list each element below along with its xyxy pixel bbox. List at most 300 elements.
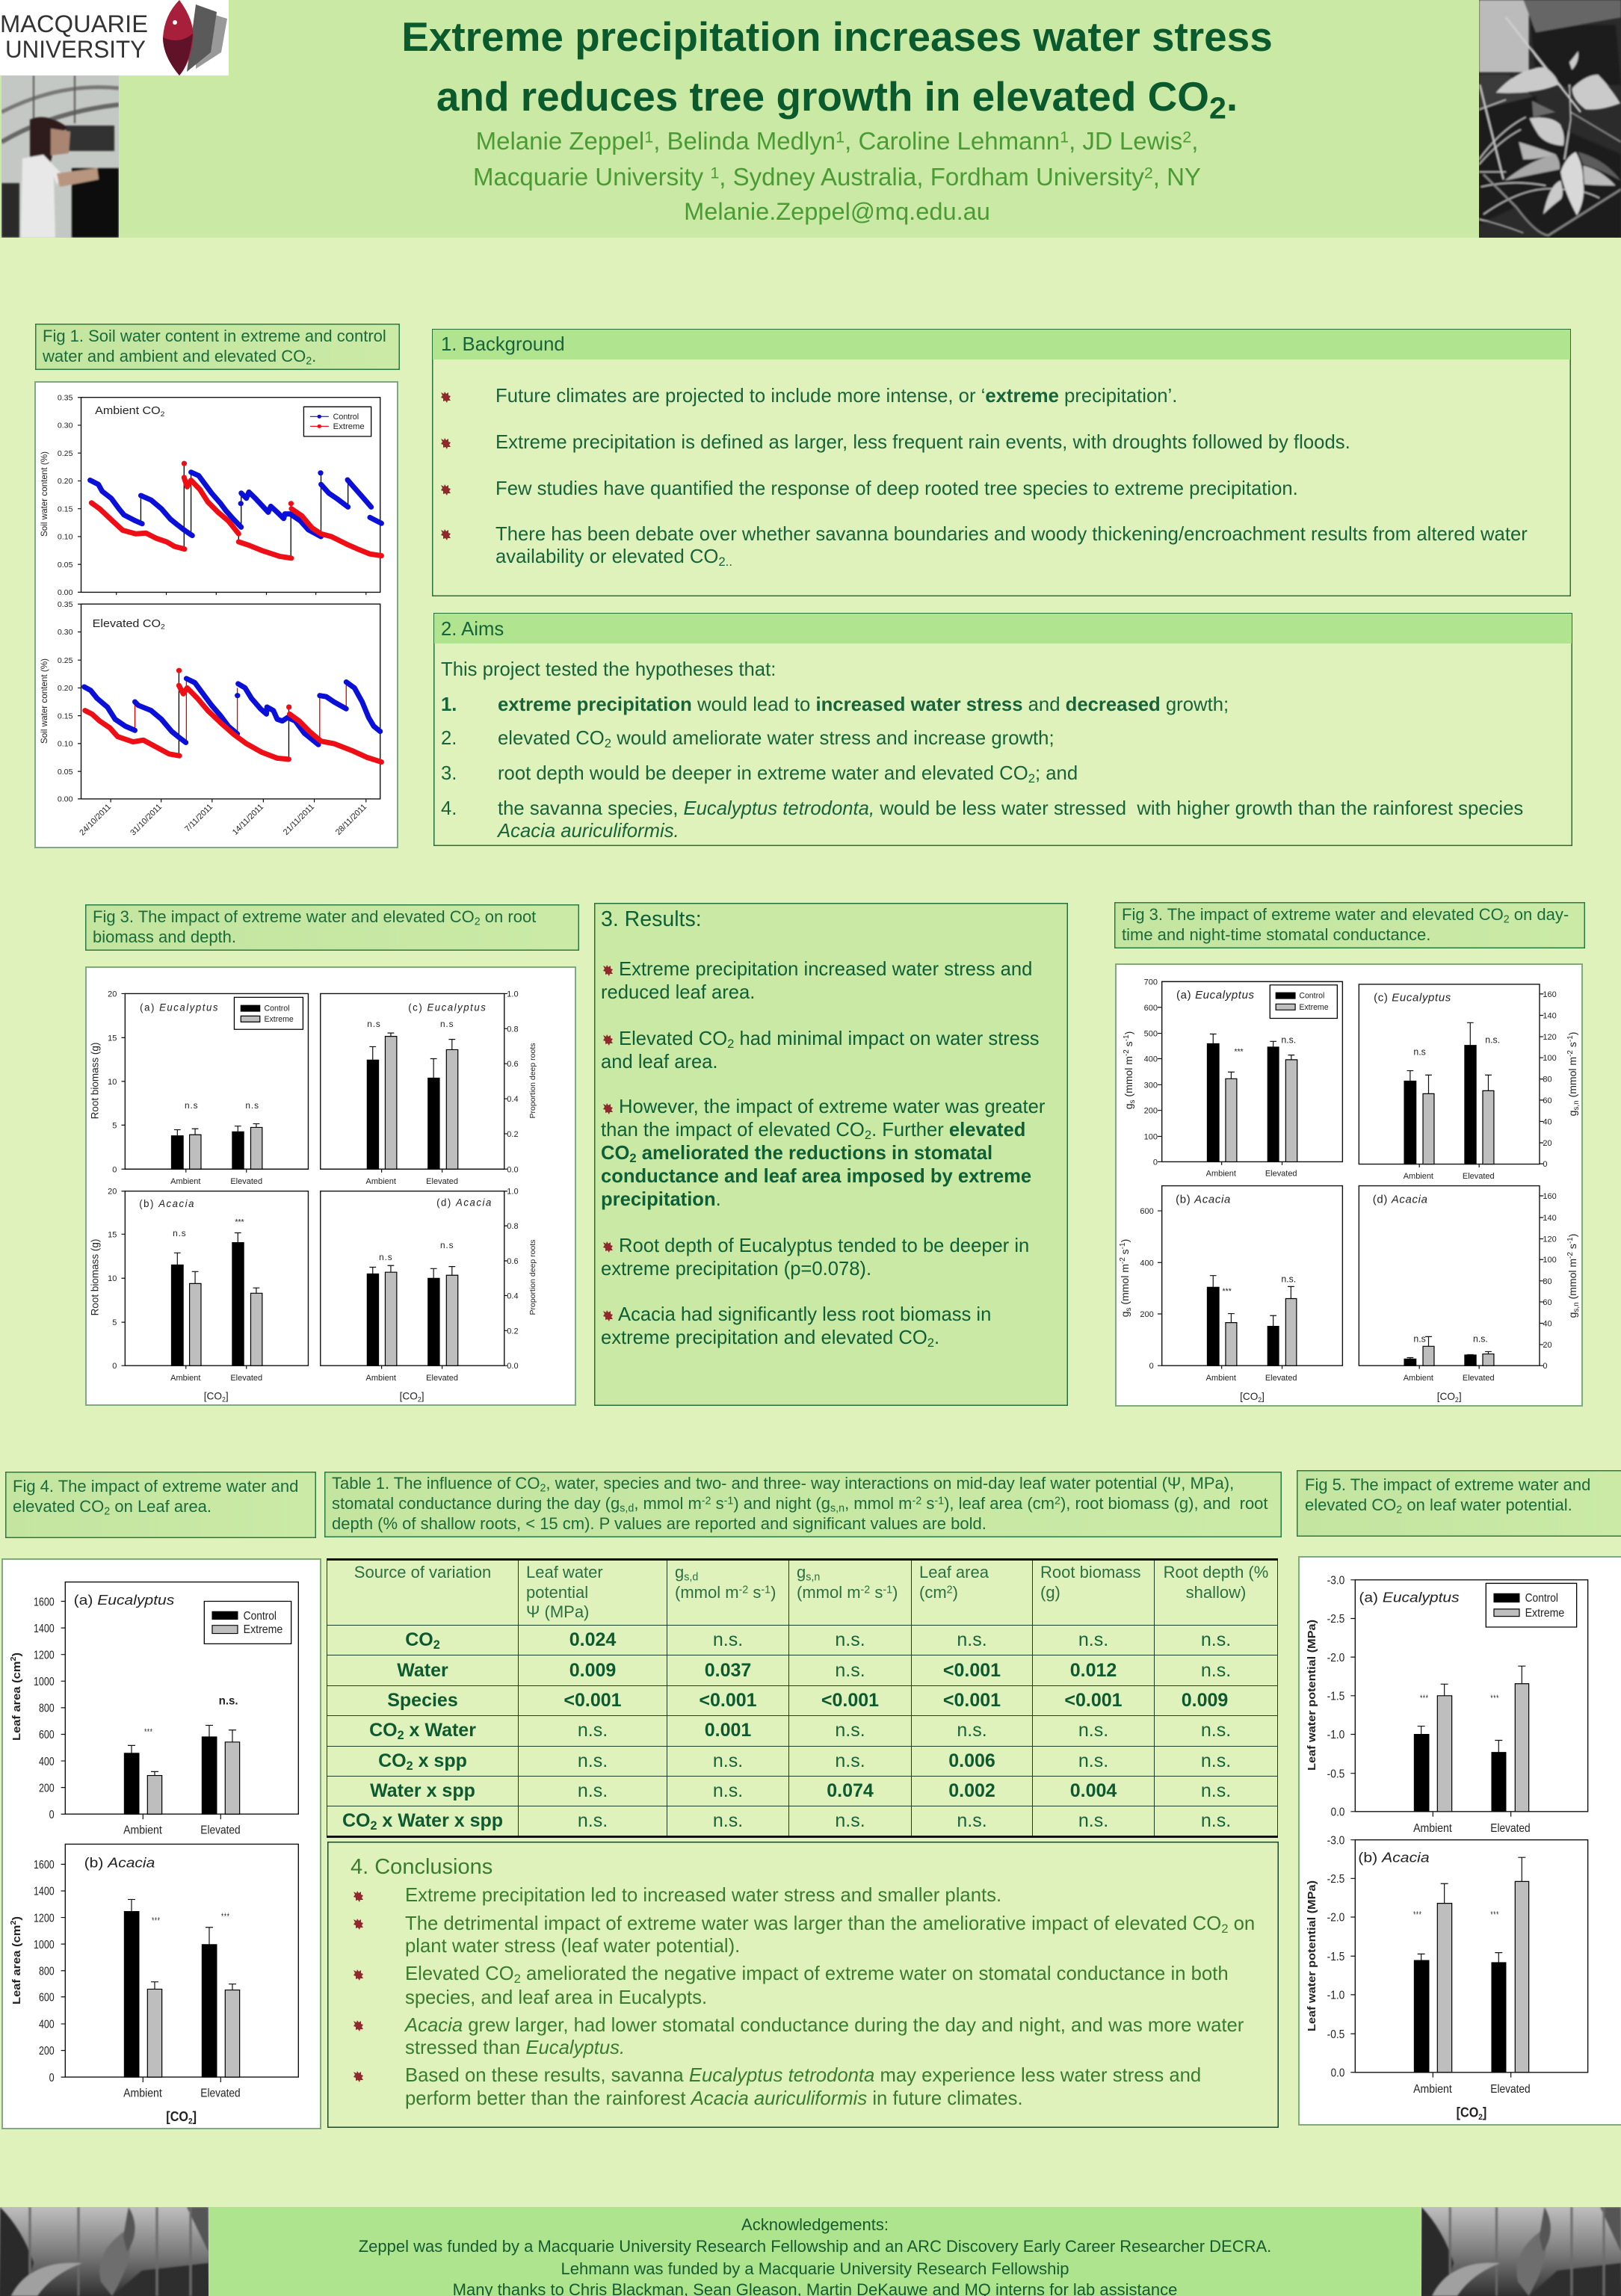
chart: leaf area: Control — [244, 1609, 277, 1623]
section: 4 conclusions: perform better than the rainforest Acacia auriculiformis in future climates. — [405, 2088, 1023, 2109]
y-axis titles: s,n — [1572, 1302, 1581, 1312]
section: 1 background: availability or elevated CO2.. — [495, 546, 732, 569]
y-axis titles — [10, 1652, 23, 2005]
table: ANOVA results: n.s. — [578, 1810, 608, 1831]
chart: soil water ambient and elevated CO2: Ambient CO — [95, 405, 138, 416]
chart: day and night stomatal conductance: 500 — [1144, 1030, 1158, 1039]
y-axis titles: -1 — [1119, 1242, 1127, 1249]
chart: root biomass and proportion deep roots: n.s — [379, 1252, 393, 1262]
logo: Macquarie University: UNIVERSITY — [5, 36, 146, 63]
chart: leaf water potential: [CO — [1457, 2105, 1471, 2120]
chart: root biomass and proportion deep roots: Extreme — [264, 1015, 294, 1024]
section: 3 results — [594, 903, 1068, 1406]
table: ANOVA results: n.s. — [1201, 1750, 1231, 1771]
chart: day and night stomatal conductance: Elevated — [1265, 1374, 1297, 1383]
chart: day and night stomatal conductance: 40 — [1543, 1117, 1552, 1126]
chart: root biomass and proportion deep roots: Ambient — [366, 1374, 396, 1383]
chart: leaf area: Elevated — [200, 1823, 241, 1836]
chart: leaf area: n.s. — [219, 1694, 238, 1707]
logo: Macquarie University: MACQUARIE — [0, 10, 148, 37]
chart: root biomass and proportion deep roots: 0.2 — [507, 1327, 519, 1336]
chart: leaf water potential: *** — [1491, 1694, 1499, 1704]
section: 2 aims: root depth would be deeper in extreme water and elevated CO2; and — [498, 763, 1078, 786]
table: ANOVA results: shallow) — [1186, 1583, 1246, 1601]
chart: root biomass and proportion deep roots: 0.8 — [507, 1025, 519, 1034]
table: ANOVA results: <0.001 — [564, 1690, 622, 1711]
chart: soil water ambient and elevated CO2: 0.30 — [58, 628, 73, 636]
caption: fig 1 — [35, 324, 400, 370]
table: ANOVA results: n.s. — [835, 1660, 865, 1681]
chart: root biomass and proportion deep roots: n.s — [245, 1100, 259, 1111]
chart: leaf area: Ambient — [123, 1823, 162, 1836]
section: 3 results: conductance and leaf area imposed by extreme — [601, 1166, 1031, 1187]
chart: root biomass and proportion deep roots: 0.2 — [507, 1130, 519, 1139]
chart: day and night stomatal conductance: 0 — [1543, 1362, 1548, 1371]
chart: soil water ambient and elevated CO2: 0.05 — [58, 768, 73, 776]
section: 4 conclusions: Elevated CO2 ameliorated the negative impact of extreme water on stomatal conductance in both — [405, 1963, 1229, 1986]
y-axis titles: (mmol m — [1119, 1264, 1131, 1307]
table: ANOVA results: n.s. — [1201, 1660, 1231, 1681]
photo: footer plants right — [1421, 2207, 1621, 2296]
table: ANOVA results: n.s. — [1201, 1720, 1231, 1741]
caption: table 1: Table 1. The influence of CO2, water, species and two- and three- way interactions on mid-day leaf water potential (Ψ, MPa), — [332, 1474, 1234, 1495]
chart: root biomass and proportion deep roots: 0 — [112, 1362, 117, 1371]
chart: root biomass and proportion deep roots: 15 — [108, 1230, 117, 1239]
chart: leaf water potential — [1327, 1573, 1588, 2121]
chart: day and night stomatal conductance: 80 — [1543, 1277, 1552, 1286]
y-axis titles: -1 — [1123, 1034, 1131, 1041]
section: 1 background: Extreme precipitation is defined as larger, less frequent rain events, with droughts followed by floods. — [495, 432, 1350, 453]
table: ANOVA results: <0.001 — [943, 1660, 1001, 1681]
caption: fig 3 stomatal conductance — [1114, 902, 1585, 948]
table: ANOVA results: n.s. — [713, 1810, 743, 1831]
chart: leaf water potential: Extreme — [1525, 1606, 1564, 1620]
section: 3 results: than the impact of elevated CO2. Further elevated — [601, 1120, 1025, 1142]
chart: leaf water potential: (b) Acacia — [1358, 1851, 1430, 1866]
chart: leaf water potential: -0.5 — [1327, 1767, 1344, 1780]
table: ANOVA results: (mmol m-2 s-1) — [675, 1583, 776, 1601]
table: ANOVA results: n.s. — [1078, 1810, 1108, 1831]
chart: leaf area — [34, 1582, 298, 2126]
caption: fig 5 — [1297, 1470, 1621, 1537]
authors and affiliations: Melanie.Zeppel@mq.edu.au — [684, 197, 990, 225]
caption: fig 4: Fig 4. The impact of extreme water and — [13, 1477, 298, 1496]
section: 2 aims: the savanna species, Eucalyptus tetrodonta, would be less water stressed with higher growth than the rainforest species — [498, 798, 1523, 819]
chart: leaf water potential: -1.0 — [1327, 1728, 1344, 1741]
table: ANOVA results: Root depth (% — [1164, 1563, 1268, 1581]
section: 4 conclusions: Acacia grew larger, had lower stomatal conductance during the day and night, and was more water — [405, 2015, 1244, 2036]
y-axis titles: g — [1566, 1312, 1578, 1318]
chart: root biomass and proportion deep roots: [CO — [204, 1391, 222, 1402]
chart: day and night stomatal conductance: [CO — [1437, 1391, 1455, 1402]
table: ANOVA results: (mmol m-2 s-1) — [797, 1583, 898, 1601]
table: ANOVA results: n.s. — [1078, 1720, 1108, 1741]
y-axis titles: Leaf area (cm — [10, 1668, 23, 1741]
chart: leaf water potential: -1.5 — [1327, 1949, 1344, 1963]
chart: leaf area: Elevated — [200, 2086, 241, 2099]
caption: fig 3 root biomass: Fig 3. The impact of extreme water and elevated CO2 on root — [93, 907, 536, 928]
panel: fig 5 leaf water potential charts — [1298, 1556, 1621, 2126]
chart: day and night stomatal conductance: Extreme — [1299, 1003, 1329, 1012]
chart: soil water ambient and elevated CO2: 0.00 — [58, 795, 73, 803]
y-axis titles: ) — [1123, 1031, 1134, 1034]
table: ANOVA results: (g) — [1040, 1583, 1060, 1601]
chart: leaf area: 1000 — [34, 1937, 55, 1951]
chart: root biomass and proportion deep roots: Ambient — [366, 1177, 396, 1186]
chart: day and night stomatal conductance: Ambient — [1206, 1170, 1236, 1179]
chart: leaf area: 1400 — [34, 1884, 55, 1898]
table: ANOVA results: n.s. — [1078, 1750, 1108, 1771]
chart: soil water ambient and elevated CO2: 0.20 — [58, 684, 73, 692]
table: ANOVA results: 0.012 — [1070, 1660, 1117, 1681]
table: ANOVA results: 0.009 — [569, 1660, 616, 1681]
section: 4 conclusions — [327, 1842, 1279, 2128]
chart: day and night stomatal conductance: Elevated — [1463, 1172, 1495, 1181]
y-axis titles: g — [1119, 1311, 1131, 1317]
chart: day and night stomatal conductance: 0 — [1543, 1160, 1548, 1169]
chart: soil water ambient and elevated CO2: 0.15 — [58, 504, 73, 513]
chart: leaf area: 1600 — [34, 1595, 55, 1608]
chart: leaf area: 1000 — [34, 1674, 55, 1688]
chart: leaf water potential: 0.0 — [1331, 1805, 1344, 1818]
y-axis titles and date labels: 31/10/2011 — [129, 803, 164, 837]
chart: root biomass and proportion deep roots: 0.4 — [507, 1292, 519, 1300]
section: 4 conclusions: Based on these results, savanna Eucalyptus tetrodonta may experience less water stress and — [405, 2065, 1201, 2086]
chart: soil water ambient and elevated CO2: 0.35 — [58, 393, 73, 402]
table: ANOVA results: 0.001 — [705, 1720, 751, 1741]
section: 4 conclusions: plant water stress (leaf water potential). — [405, 1936, 740, 1957]
chart: root biomass and proportion deep roots: n.s — [367, 1019, 381, 1029]
chart: soil water ambient and elevated CO2: 2 — [161, 410, 165, 418]
chart: leaf area: 2 — [188, 2117, 193, 2126]
y-axis titles: s — [1566, 1042, 1578, 1050]
chart: leaf area: 800 — [39, 1701, 55, 1715]
photo: seedling in pot — [1479, 0, 1621, 238]
title — [401, 13, 1273, 125]
section: 1 background: Few studies have quantified the response of deep rooted tree species to extreme precipitation. — [495, 478, 1298, 499]
chart: day and night stomatal conductance: 40 — [1543, 1319, 1552, 1329]
panel: fig 3 stomatal conductance charts — [1115, 963, 1583, 1407]
y-axis titles and date labels: 14/11/2011 — [231, 803, 265, 837]
chart: day and night stomatal conductance: (a) Eucalyptus — [1176, 989, 1255, 1002]
y-axis titles: ) — [1566, 1234, 1578, 1237]
chart: leaf area: Extreme — [244, 1622, 282, 1636]
chart: day and night stomatal conductance: (b) Acacia — [1176, 1193, 1231, 1206]
section: 3 results: Acacia had significantly less root biomass in — [618, 1303, 991, 1324]
chart: day and night stomatal conductance: Control — [1299, 992, 1324, 1001]
chart: day and night stomatal conductance: n.s. — [1281, 1274, 1296, 1285]
chart: root biomass and proportion deep roots: 5 — [112, 1318, 117, 1327]
chart: day and night stomatal conductance: 140 — [1543, 1214, 1557, 1223]
chart: day and night stomatal conductance: 200 — [1140, 1310, 1154, 1319]
section: 4 conclusions: 4. Conclusions — [351, 1855, 493, 1879]
caption: fig 1: water and ambient and elevated CO2. — [43, 347, 316, 368]
table: ANOVA results: n.s. — [835, 1720, 865, 1741]
chart: leaf water potential: Ambient — [1413, 2081, 1452, 2095]
table: ANOVA results: Ψ (MPa) — [526, 1602, 589, 1621]
section: 1 background: 1. Background — [441, 333, 565, 354]
title: and reduces tree growth in elevated CO2. — [436, 73, 1238, 125]
y-axis titles — [1306, 1620, 1318, 2031]
section: 4 conclusions: species, and leaf area in Eucalypts. — [405, 1987, 707, 2008]
chart: day and night stomatal conductance: 700 — [1144, 978, 1158, 987]
table: ANOVA results: n.s. — [713, 1780, 743, 1801]
chart: soil water ambient and elevated CO2: Elevated CO — [93, 617, 138, 629]
chart: root biomass and proportion deep roots: 0.6 — [507, 1060, 519, 1069]
chart: root biomass and proportion deep roots: 0.6 — [507, 1257, 519, 1266]
table: ANOVA results: 0.004 — [1070, 1780, 1117, 1801]
chart: root biomass and proportion deep roots: (b) Acacia — [139, 1198, 195, 1209]
caption: table 1: depth (% of shallow roots, < 15 cm). P values are reported and significant values are bold. — [332, 1514, 987, 1533]
chart: root biomass and proportion deep roots: 20 — [108, 1188, 117, 1197]
chart: leaf water potential: 2 — [1478, 2112, 1483, 2121]
y-axis titles and date labels: Soil water content (%) — [39, 451, 49, 537]
chart: leaf water potential: -0.5 — [1327, 2027, 1344, 2041]
chart: day and night stomatal conductance: 120 — [1543, 1235, 1557, 1244]
chart: leaf water potential: *** — [1420, 1694, 1429, 1704]
chart: root biomass and proportion deep roots: 1.0 — [507, 990, 519, 999]
chart: leaf area: 200 — [39, 2044, 55, 2058]
chart: root biomass and proportion deep roots: 10 — [108, 1078, 117, 1087]
chart: leaf area: 0 — [49, 2070, 55, 2084]
caption: table 1: stomatal conductance during the day (gs,d, mmol m-2 s-1) and night (gs,n, mmol m-2 s-1), leaf area (cm2), root biomass (g), and root — [332, 1494, 1268, 1515]
table: ANOVA results: n.s. — [957, 1629, 987, 1650]
y-axis titles: (mmol m — [1566, 1259, 1578, 1302]
chart: root biomass and proportion deep roots: n.s — [173, 1228, 187, 1238]
chart: day and night stomatal conductance: 400 — [1140, 1259, 1154, 1268]
chart: leaf area: 1400 — [34, 1621, 55, 1635]
y-axis titles: (mmol m — [1566, 1057, 1578, 1100]
photo: footer plants left — [0, 2207, 209, 2296]
table: ANOVA results: 0.024 — [569, 1629, 616, 1650]
y-axis titles: -1 — [1566, 1237, 1575, 1244]
chart: leaf water potential: -1.0 — [1327, 1988, 1344, 2002]
chart: day and night stomatal conductance: Ambient — [1404, 1374, 1433, 1383]
chart: root biomass and proportion deep roots: 0.4 — [507, 1095, 519, 1104]
chart: day and night stomatal conductance: 20 — [1543, 1341, 1552, 1350]
table: ANOVA results: n.s. — [957, 1720, 987, 1741]
y-axis titles: s,n — [1572, 1100, 1581, 1111]
y-axis titles: -2 — [1119, 1257, 1127, 1264]
chart: soil water ambient and elevated CO2: 0.10 — [58, 740, 73, 748]
authors and affiliations: Melanie Zeppel1, Belinda Medlyn1, Caroline Lehmann1, JD Lewis2, — [476, 127, 1198, 155]
chart: soil water ambient and elevated CO2: 0.30 — [58, 422, 73, 430]
section: 1 background — [432, 329, 1571, 596]
y-axis titles: Root biomass (g) — [90, 1239, 100, 1315]
table: ANOVA results: Water x spp — [370, 1780, 475, 1801]
y-axis titles: -1 — [1566, 1035, 1575, 1042]
photo: researcher in glasshouse — [1, 75, 119, 238]
y-axis titles: g — [1566, 1111, 1578, 1116]
chart: day and night stomatal conductance: 600 — [1140, 1207, 1154, 1216]
chart: soil water ambient and elevated CO2: 0.00 — [58, 588, 73, 596]
chart: leaf area: 1200 — [34, 1911, 55, 1925]
y-axis titles: (mmol m — [1123, 1056, 1134, 1099]
chart: day and night stomatal conductance: [CO — [1240, 1391, 1258, 1402]
chart: day and night stomatal conductance: 2 — [1455, 1396, 1459, 1404]
section: 2 aims: 3. — [441, 763, 457, 784]
section: 3 results: CO2 ameliorated the reductions in stomatal — [601, 1143, 992, 1165]
chart: day and night stomatal conductance: 0 — [1149, 1362, 1154, 1371]
chart: day and night stomatal conductance: 400 — [1144, 1055, 1158, 1064]
table: ANOVA results: n.s. — [835, 1810, 865, 1831]
chart: day and night stomatal conductance: n.s — [1413, 1047, 1426, 1058]
table: ANOVA results: 0.037 — [705, 1660, 751, 1681]
chart: root biomass and proportion deep roots: n.s — [440, 1019, 454, 1029]
chart: leaf area: 400 — [39, 2017, 55, 2031]
chart: day and night stomatal conductance: 60 — [1543, 1298, 1552, 1307]
caption: table 1 — [324, 1472, 1282, 1537]
chart: leaf area: 1200 — [34, 1648, 55, 1661]
y-axis titles: ) — [10, 1652, 23, 1656]
chart: day and night stomatal conductance: n.s. — [1281, 1034, 1296, 1046]
chart: leaf water potential: ] — [1483, 2105, 1486, 2120]
chart: day and night stomatal conductance: 600 — [1144, 1004, 1158, 1013]
y-axis titles: Proportion deep roots — [528, 1240, 537, 1315]
logo: Macquarie University — [0, 0, 229, 75]
chart: soil water ambient and elevated CO2: 0.05 — [58, 561, 73, 569]
chart: root biomass and proportion deep roots: n.s — [185, 1100, 198, 1111]
section: 2 aims: 2. — [441, 728, 457, 749]
chart: day and night stomatal conductance: (d) Acacia — [1373, 1193, 1428, 1206]
y-axis titles: s — [1566, 1244, 1578, 1252]
chart: root biomass and proportion deep roots: *** — [235, 1218, 244, 1226]
table: ANOVA results: n.s. — [713, 1750, 743, 1771]
caption: fig 1: Fig 1. Soil water content in extreme and control — [43, 327, 386, 345]
chart: root biomass and proportion deep roots: 20 — [108, 990, 117, 999]
chart: day and night stomatal conductance: 120 — [1543, 1033, 1557, 1042]
chart: day and night stomatal conductance: 100 — [1144, 1132, 1158, 1142]
caption: fig 5: Fig 5. The impact of extreme water and — [1305, 1475, 1590, 1494]
y-axis titles and date labels: 7/11/2011 — [183, 803, 214, 834]
chart: leaf water potential: -3.0 — [1327, 1833, 1344, 1847]
table: ANOVA results: Source of variation — [354, 1563, 491, 1581]
table: ANOVA results: potential — [526, 1583, 588, 1601]
table: ANOVA results: n.s. — [578, 1780, 608, 1801]
authors and affiliations — [473, 127, 1201, 225]
section: 3 results: extreme precipitation (p=0.078). — [601, 1259, 871, 1280]
chart: leaf water potential: 0.0 — [1331, 2066, 1344, 2079]
section: 2 aims: 2. Aims — [441, 619, 504, 640]
chart: root biomass and proportion deep roots: Control — [264, 1004, 290, 1013]
chart: day and night stomatal conductance: (c) Eucalyptus — [1374, 991, 1451, 1004]
chart: root biomass and proportion deep roots: 1.0 — [507, 1188, 519, 1197]
table: ANOVA results: 0.009 — [1182, 1690, 1228, 1711]
chart: leaf water potential: *** — [1413, 1910, 1422, 1921]
caption: fig 4: elevated CO2 on Leaf area. — [13, 1497, 211, 1518]
table: ANOVA results: Species — [387, 1690, 458, 1711]
section: 2 aims: Acacia auriculiformis. — [498, 821, 679, 842]
table: ANOVA results: CO2 x spp — [378, 1750, 467, 1773]
chart: root biomass and proportion deep roots: 0.0 — [507, 1165, 519, 1174]
chart: soil water ambient and elevated CO2: 0.35 — [58, 600, 73, 608]
chart: day and night stomatal conductance: 20 — [1543, 1139, 1552, 1148]
chart: soil water ambient and elevated CO2: 0.25 — [58, 656, 73, 664]
chart: leaf area: [CO — [166, 2109, 181, 2125]
acknowledgements: Lehmann was funded by a Macquarie University Research Fellowship — [561, 2259, 1069, 2278]
section: 1 background: There has been debate over whether savanna boundaries and woody thickening/encroachment results from altered water — [495, 524, 1528, 545]
y-axis titles and date labels: 24/10/2011 — [78, 803, 113, 837]
y-axis titles: Proportion deep roots — [528, 1043, 537, 1118]
chart: leaf water potential: (a) Eucalyptus — [1359, 1590, 1460, 1606]
table: ANOVA results: <0.001 — [1064, 1690, 1123, 1711]
chart: root biomass and proportion deep roots: 0.0 — [507, 1362, 519, 1371]
chart: day and night stomatal conductance: 60 — [1543, 1096, 1552, 1105]
chart: root biomass and proportion deep roots: ] — [422, 1391, 424, 1402]
section: 4 conclusions: Extreme precipitation led to increased water stress and smaller plants. — [405, 1885, 1001, 1906]
chart: day and night stomatal conductance: 300 — [1144, 1081, 1158, 1090]
table: ANOVA results: CO2 x Water x spp — [342, 1810, 503, 1833]
table: ANOVA results: n.s. — [578, 1750, 608, 1771]
table: ANOVA results: (cm2) — [919, 1583, 958, 1601]
table: ANOVA results: 0.002 — [948, 1780, 995, 1801]
y-axis titles: 2 — [10, 1920, 18, 1925]
chart: root biomass and proportion deep roots: [CO — [400, 1391, 418, 1402]
chart: day and night stomatal conductance: ] — [1262, 1391, 1265, 1402]
chart: leaf area: 1600 — [34, 1857, 55, 1871]
chart: root biomass and proportion deep roots: (c) Eucalyptus — [408, 1002, 487, 1013]
chart: soil water ambient and elevated CO2: 0.25 — [58, 449, 73, 457]
chart: soil water ambient and elevated CO2: Extreme — [333, 422, 365, 430]
chart: leaf area: Ambient — [123, 2086, 162, 2099]
chart: day and night stomatal conductance: Elevated — [1463, 1374, 1495, 1383]
chart: day and night stomatal conductance: n.s. — [1485, 1034, 1500, 1046]
chart: root biomass and proportion deep roots: (a) Eucalyptus — [140, 1002, 219, 1013]
table: ANOVA results: CO2 — [405, 1629, 440, 1652]
chart: day and night stomatal conductance — [1140, 978, 1557, 1404]
chart: root biomass and proportion deep roots: ] — [226, 1391, 229, 1402]
y-axis titles: Leaf water potential (MPa) — [1306, 1880, 1318, 2031]
chart: root biomass and proportion deep roots: Elevated — [426, 1374, 458, 1383]
chart: leaf area: ] — [193, 2109, 197, 2125]
table: ANOVA results: 0.006 — [948, 1750, 995, 1771]
chart: soil water ambient and elevated CO2: 0.10 — [58, 533, 73, 541]
caption: fig 4 — [5, 1472, 316, 1538]
chart: leaf water potential: Ambient — [1413, 1821, 1452, 1834]
chart: root biomass and proportion deep roots: 2 — [418, 1395, 422, 1403]
chart: day and night stomatal conductance: 140 — [1543, 1011, 1557, 1021]
chart: leaf area: (b) Acacia — [84, 1856, 155, 1871]
table: ANOVA results: <0.001 — [821, 1690, 879, 1711]
chart: soil water ambient and elevated CO2: 0.15 — [58, 712, 73, 720]
y-axis titles and date labels: Soil water content (%) — [39, 658, 49, 744]
chart: root biomass and proportion deep roots: (d) Acacia — [436, 1197, 493, 1208]
y-axis titles: -2 — [1566, 1252, 1575, 1259]
table: ANOVA results — [327, 1558, 1278, 1838]
chart: root biomass and proportion deep roots: Ambient — [170, 1374, 200, 1383]
chart: day and night stomatal conductance: 160 — [1543, 990, 1557, 999]
section: 3 results: reduced leaf area. — [601, 982, 755, 1003]
chart: day and night stomatal conductance: n.s. — [1473, 1333, 1488, 1345]
chart: leaf water potential: -2.5 — [1327, 1612, 1344, 1626]
y-axis titles: -2 — [1123, 1049, 1131, 1056]
y-axis titles: s — [1123, 1041, 1134, 1049]
table: ANOVA results: n.s. — [1201, 1810, 1231, 1831]
table: ANOVA results: Leaf area — [919, 1563, 989, 1581]
section: 2 aims: 4. — [441, 798, 457, 819]
chart: root biomass and proportion deep roots: n.s — [440, 1240, 454, 1250]
y-axis titles: Root biomass (g) — [90, 1043, 100, 1119]
chart: soil water ambient and elevated CO2: 0.20 — [58, 477, 73, 485]
y-axis titles and date labels — [39, 451, 368, 837]
chart: day and night stomatal conductance: *** — [1223, 1287, 1232, 1296]
section: 3 results: Elevated CO2 had minimal impact on water stress — [619, 1028, 1040, 1051]
chart: leaf area: *** — [221, 1913, 230, 1922]
chart: leaf water potential: -2.0 — [1327, 1650, 1344, 1664]
section: 3 results: Root depth of Eucalyptus tended to be deeper in — [619, 1235, 1029, 1256]
table: ANOVA results: n.s. — [1201, 1780, 1231, 1801]
section: 3 results: and leaf area. — [601, 1051, 718, 1072]
